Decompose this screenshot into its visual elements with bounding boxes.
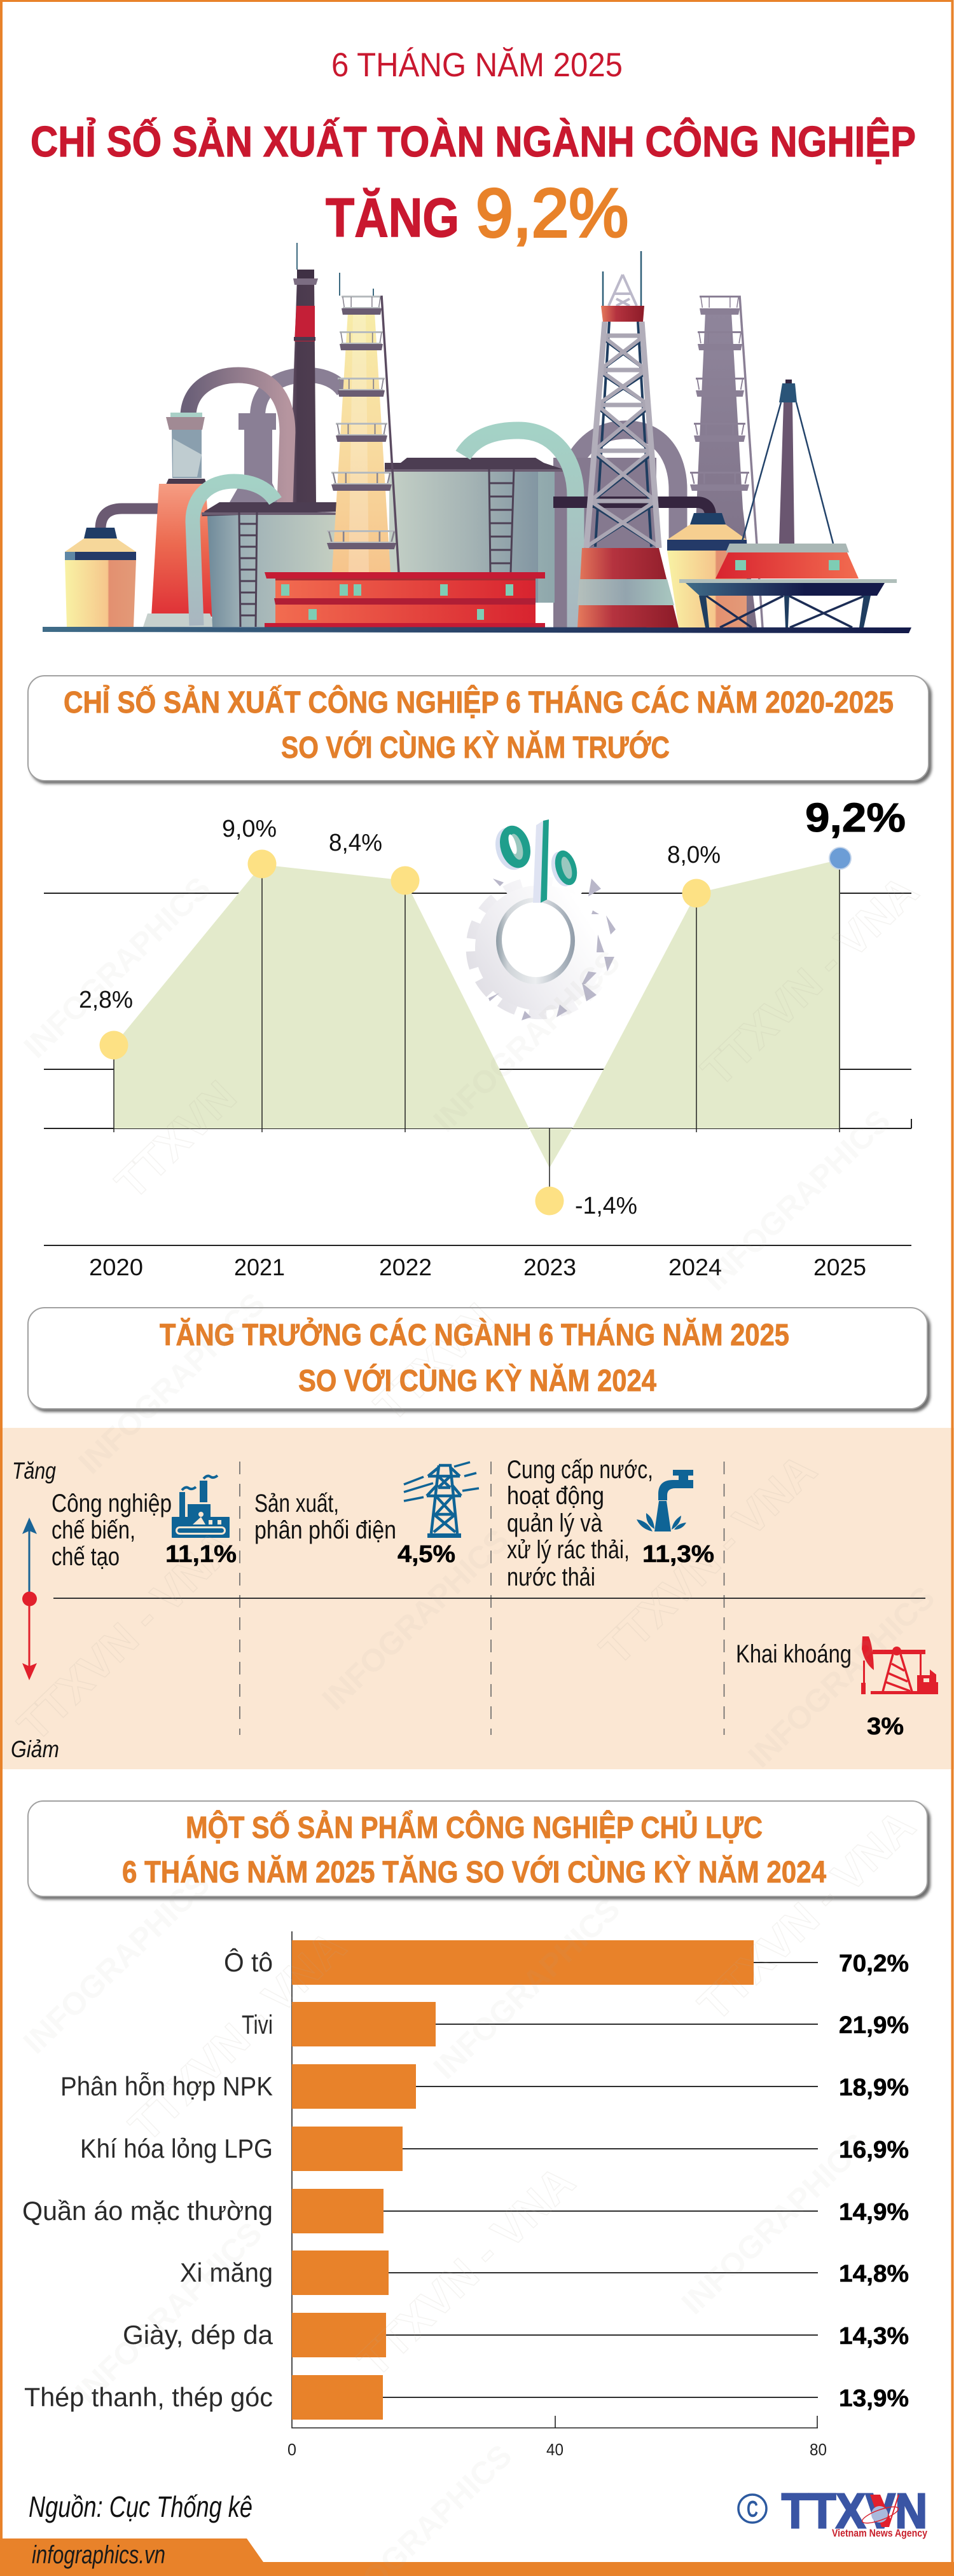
watermark: INFOGRAPHICS — [72, 1285, 272, 1481]
data labels: 9,2% — [805, 795, 906, 840]
source: Nguồn: Cục Thống kê — [29, 2490, 252, 2523]
year axis labels: 2021 — [234, 1254, 285, 1280]
section header: key products: 6 THÁNG NĂM 2025 TĂNG SO VỚI CÙNG KỲ NĂM 2024 — [122, 1854, 826, 1889]
yellow tank right — [667, 513, 747, 627]
logo: TTXVN: Vietnam News Agency — [832, 2527, 927, 2539]
illustration: industrial plant — [43, 243, 911, 633]
watermark — [8, 866, 942, 2576]
watermark: TTXVN - VNA — [692, 866, 927, 1095]
watermark: TTXVN - VNA — [689, 1800, 924, 2030]
fill below zero — [529, 1128, 572, 1168]
sector: water and waste: quản lý và — [507, 1509, 603, 1537]
year axis labels: 2025 — [813, 1254, 866, 1280]
data labels: 9,0% — [222, 816, 277, 842]
values: 18,9% — [839, 2074, 909, 2101]
dark pipe right — [553, 502, 710, 516]
axis tick labels: 80 — [810, 2440, 827, 2459]
watermark: INFOGRAPHICS — [69, 2215, 269, 2410]
value: 11,1% — [165, 1541, 237, 1568]
category labels: Xi măng — [180, 2257, 273, 2287]
section header: sector growth: TĂNG TRƯỞNG CÁC NGÀNH 6 THÁNG NĂM 2025 — [160, 1317, 789, 1352]
offshore platform — [679, 380, 897, 627]
footer band — [0, 2538, 954, 2576]
data labels: 2,8% — [79, 987, 133, 1013]
watermark: INFOGRAPHICS — [697, 1102, 897, 1298]
category labels: Tivi — [242, 2010, 273, 2039]
watermark: INFOGRAPHICS — [427, 1891, 627, 2086]
values: 21,9% — [839, 2012, 909, 2039]
big grey tank — [385, 458, 563, 603]
section header: key products — [28, 1801, 930, 1900]
watermark: TTXVN - VNA — [120, 1921, 355, 2151]
chimney — [289, 243, 318, 502]
logo: TTXVN: TTXVN — [782, 2484, 927, 2538]
axis tick labels: 40 — [546, 2440, 563, 2459]
category labels: Ô tô — [224, 1947, 273, 1977]
title headline: growth figure: 9,2% — [476, 174, 628, 251]
category labels: Khí hóa lỏng LPG — [80, 2134, 273, 2163]
sector: water and waste: nước thải — [507, 1563, 595, 1591]
furnace base — [143, 613, 215, 627]
icon: oil pumpjack — [861, 1636, 938, 1694]
title headline: growth figure — [326, 174, 628, 251]
values: 16,9% — [839, 2137, 909, 2163]
sector: electricity — [254, 1462, 479, 1568]
year axis labels — [89, 1254, 866, 1280]
sector: manufacturing: chế biến, — [52, 1516, 135, 1544]
category labels: Phân hỗn hợp NPK — [60, 2071, 273, 2101]
dark pipe left — [100, 509, 160, 529]
section header: yearly index: SO VỚI CÙNG KỲ NĂM TRƯỚC — [281, 730, 670, 765]
axis tick labels — [287, 2440, 827, 2459]
area chart: industrial production index 2020-2025 — [44, 795, 911, 1280]
values: 14,9% — [839, 2199, 909, 2226]
axis tick labels: 0 — [287, 2440, 296, 2459]
section header: sector growth: SO VỚI CÙNG KỲ NĂM 2024 — [298, 1363, 656, 1398]
data labels: 8,4% — [329, 830, 382, 856]
arrow: down — [22, 1602, 37, 1680]
yellow tank left — [65, 528, 136, 627]
data labels: 8,0% — [667, 842, 721, 868]
watermark: INFOGRAPHICS — [315, 1522, 516, 1717]
data labels — [79, 795, 906, 1219]
yellow tower — [327, 273, 399, 573]
year axis labels: 2024 — [668, 1254, 722, 1280]
icon: gear with percent sign — [466, 819, 616, 1020]
arrow: up — [22, 1518, 37, 1596]
bar chart: key industrial products — [22, 1931, 909, 2459]
watermark: INFOGRAPHICS — [742, 1579, 942, 1774]
axis label: decrease: Giảm — [11, 1736, 59, 1762]
sector: electricity: Sản xuất, — [254, 1490, 339, 1518]
sector: manufacturing: Công nghiệp — [52, 1490, 172, 1518]
title headline: growth figure: TĂNG — [326, 188, 459, 249]
year axis labels: 2023 — [523, 1254, 576, 1280]
data labels: -1,4% — [575, 1193, 637, 1219]
values — [839, 1950, 909, 2412]
big teal pipe — [463, 430, 576, 627]
section header: yearly index — [28, 676, 932, 784]
icon: factory — [172, 1476, 230, 1538]
value: 3% — [867, 1713, 904, 1740]
values: 70,2% — [839, 1950, 909, 1977]
bars — [292, 1940, 754, 2420]
area fill — [114, 860, 840, 1128]
category labels — [22, 1947, 273, 2412]
watermark: TTXVN - VNA — [8, 1521, 244, 1750]
icon: power pylon — [404, 1462, 479, 1538]
derrick base — [577, 548, 679, 627]
footer website: infographics.vn — [32, 2541, 165, 2569]
background silhouette: towers and arches — [230, 296, 763, 627]
values: 14,8% — [839, 2261, 909, 2287]
sector: water and waste: xử lý rác thải, — [507, 1536, 630, 1564]
section header: key products: MỘT SỐ SẢN PHẨM CÔNG NGHIỆP CHỦ LỰC — [186, 1810, 763, 1845]
oil derrick — [586, 251, 659, 548]
small teal pipe — [193, 481, 275, 626]
watermark: INFOGRAPHICS — [427, 943, 627, 1139]
watermark: INFOGRAPHICS — [17, 870, 218, 1065]
category labels: Quần áo mặc thường — [22, 2196, 273, 2226]
category labels: Giày, dép da — [123, 2320, 273, 2350]
red building — [265, 572, 545, 627]
values: 14,3% — [839, 2323, 909, 2350]
sector: manufacturing: chế tạo — [52, 1543, 120, 1571]
category labels: Thép thanh, thép góc — [24, 2382, 273, 2412]
section header: sector growth — [28, 1308, 930, 1412]
data points — [99, 847, 851, 1216]
year axis labels: 2022 — [379, 1254, 432, 1280]
axis origin dot — [22, 1592, 37, 1606]
flue stack — [166, 413, 207, 484]
value: 4,5% — [398, 1541, 455, 1568]
watermark: INFOGRAPHICS — [675, 2126, 875, 2321]
sector: mining — [736, 1636, 938, 1740]
watermark: TTXVN — [106, 1071, 245, 1208]
value: 11,3% — [642, 1541, 714, 1568]
values: 13,9% — [839, 2385, 909, 2412]
sector: manufacturing — [52, 1476, 237, 1571]
sector: water and waste — [507, 1456, 714, 1591]
sector: water and waste: Cung cấp nước, — [507, 1456, 653, 1484]
sector: water and waste: hoạt động — [507, 1482, 604, 1510]
year axis labels: 2020 — [89, 1254, 143, 1280]
furnace — [151, 484, 216, 617]
watermark: TTXVN - VNA — [349, 2156, 584, 2386]
watermark: TTXVN — [365, 1294, 504, 1430]
grey tank left — [202, 502, 340, 627]
purple arch pipe — [188, 375, 287, 504]
axis label: increase: Tăng — [12, 1458, 56, 1484]
ground — [43, 627, 911, 633]
logo: TTXVN: C — [747, 2496, 758, 2522]
sector: mining: Khai khoáng — [736, 1640, 852, 1668]
icon: water faucet — [637, 1470, 693, 1531]
panel: sector growth chart — [0, 1428, 954, 1769]
sector: electricity: phân phối điện — [254, 1516, 396, 1544]
kicker: period: 6 THÁNG NĂM 2025 — [331, 46, 623, 84]
watermark: TTXVN - VNA — [590, 1444, 826, 1674]
watermark: INFOGRAPHICS — [17, 1865, 217, 2060]
